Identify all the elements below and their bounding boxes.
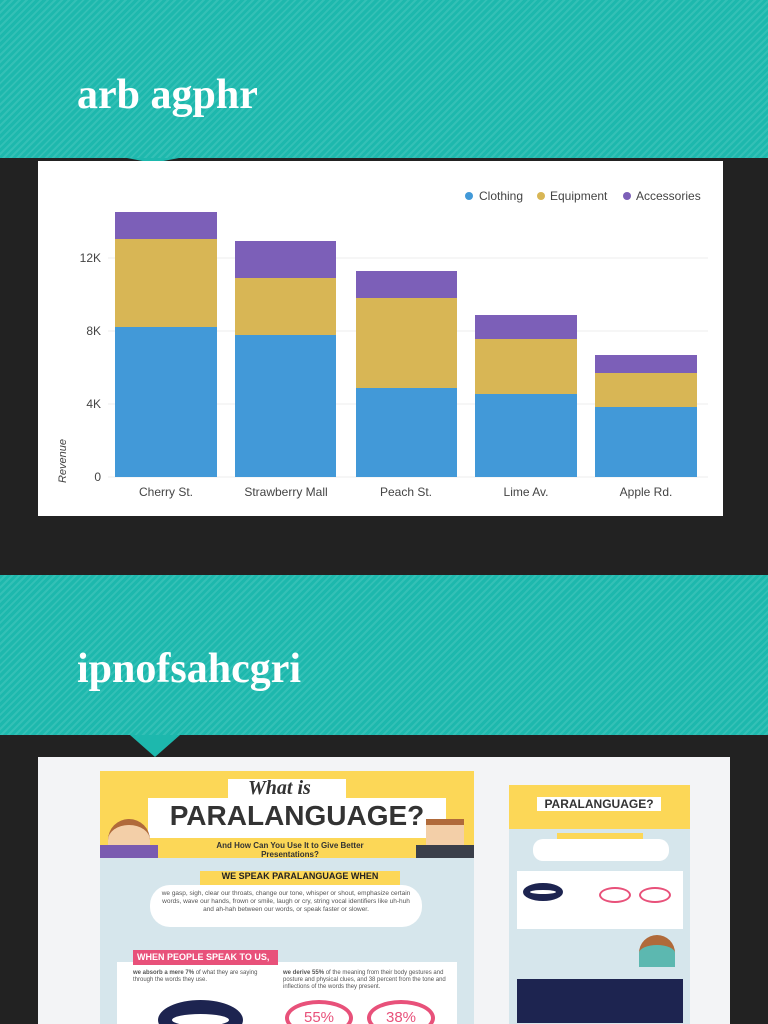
y axis labels	[80, 251, 101, 484]
x labels	[139, 485, 672, 499]
infographic large: WHEN PEOPLE SPEAK TO US,	[137, 952, 269, 962]
banner: WE SPEAK PARALANGUAGE WHEN	[222, 871, 378, 881]
x labels: Lime Av.	[504, 485, 548, 499]
yellow header: And How Can You Use It to Give Better Presentations?	[216, 841, 364, 859]
yellow header: PARALANGUAGE?	[170, 800, 424, 831]
infographic large	[100, 771, 474, 1024]
x labels: Peach St.	[380, 485, 432, 499]
y axis labels: 0	[94, 470, 101, 484]
x labels: Apple Rd.	[620, 485, 672, 499]
infographic small	[509, 785, 690, 1024]
x labels: Cherry St.	[139, 485, 193, 499]
legend: Equipment	[550, 189, 608, 203]
legend	[465, 189, 701, 203]
stats card: we absorb a mere 7% of what they are saying through the words they use.	[133, 970, 257, 983]
ring 55	[285, 1000, 353, 1024]
y axis labels: 4K	[86, 397, 101, 411]
y axis labels: 12K	[80, 251, 101, 265]
pointer notch 1	[127, 158, 179, 163]
yellow header: What is	[248, 777, 311, 799]
legend: Accessories	[636, 189, 701, 203]
infographic small: PARALANGUAGE?	[544, 797, 654, 811]
speech bubble: we gasp, sigh, clear our throats, change our tone, whisper or shout, emphasize certain words, wave our hands, frown or smile, laugh or cry, string vocal identifiers like uh-huh and ah-hah between our words, or speak faster or slower.	[162, 890, 410, 913]
panel: revenue chart	[38, 161, 723, 516]
icon: man	[426, 819, 464, 853]
title 1: arb agphr	[77, 72, 258, 118]
header band 2	[0, 575, 768, 735]
banner	[200, 871, 400, 885]
icon: woman	[108, 819, 150, 857]
legend: Clothing	[479, 189, 523, 203]
stats card	[117, 962, 457, 1024]
title 2: ipnofsahcgri	[77, 646, 301, 692]
pointer notch 2	[130, 735, 180, 757]
x labels: Strawberry Mall	[244, 485, 328, 499]
yellow header	[100, 771, 474, 858]
ring 38	[367, 1000, 435, 1024]
y axis labels: 8K	[86, 324, 101, 338]
panel: revenue chart: Revenue	[57, 439, 69, 483]
donut	[158, 1000, 243, 1024]
stats card: we derive 55% of the meaning from their body gestures and posture and physical clues, and 38 percent from the tone and inflections of the words they present.	[283, 970, 446, 990]
bars	[115, 212, 697, 477]
speech bubble	[150, 885, 422, 927]
header band 1	[0, 0, 768, 158]
panel: infographic preview	[38, 757, 730, 1024]
